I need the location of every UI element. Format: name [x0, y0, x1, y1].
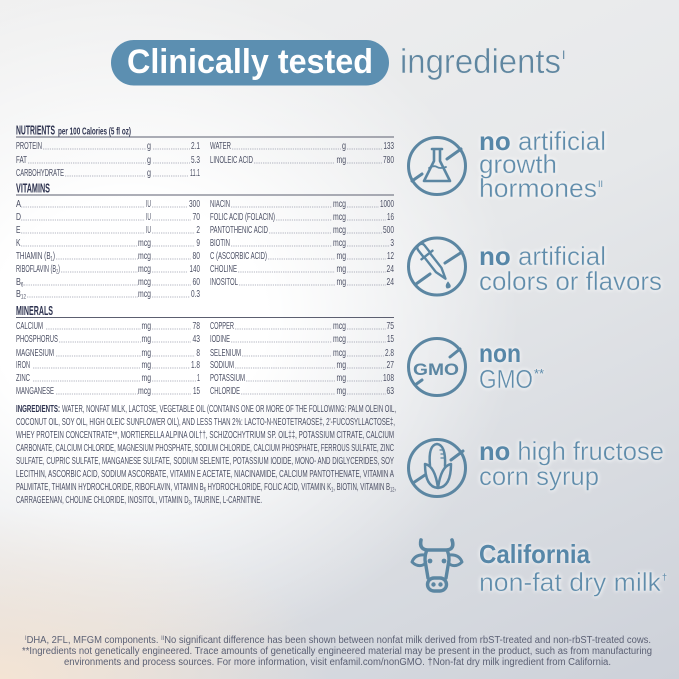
vitamin rows: 3 — [390, 238, 394, 249]
callout: non GMO: non — [479, 338, 521, 368]
vitamin rows: INOSITOL — [210, 277, 238, 288]
mineral rows: 63 — [386, 386, 394, 397]
mineral rows: mg — [336, 386, 346, 397]
panel: minerals table — [16, 304, 394, 397]
vitamin rows: mcg — [333, 212, 346, 223]
mineral rows: IRON — [16, 360, 30, 371]
mineral rows: 15 — [387, 334, 394, 345]
callout: no artificial growth hormones: growth — [479, 149, 557, 179]
callout: no artificial growth hormones: no artificial — [479, 126, 606, 156]
footnotes: **Ingredients not genetically engineered. Trace amounts of genetically engineered material may be present in the product, such as from manufacturing — [22, 646, 652, 657]
callout: no high fructose corn syrup: no high fructose — [479, 436, 664, 466]
nutrient rows: LINOLEIC ACID — [210, 155, 253, 166]
footnotes: DHA, 2FL, MFGM components. — [27, 635, 161, 646]
nutrient rows: FAT — [16, 155, 27, 166]
text block: ingredients: 6 — [204, 486, 206, 494]
nutrient rows: 133 — [384, 141, 394, 152]
icon: cow head — [412, 540, 462, 591]
mineral rows: 75 — [386, 321, 394, 332]
mineral rows: mcg — [138, 386, 151, 397]
vitamin rows: 500 — [383, 225, 394, 236]
mineral rows: SELENIUM — [210, 348, 241, 359]
text block: ingredients: CARRAGEENAN, CHOLINE CHLORIDE, INOSITOL, VITAMIN D — [16, 495, 316, 506]
mineral rows: SODIUM — [210, 360, 234, 371]
mineral rows: mg — [142, 321, 151, 332]
footnotes: environments and process sources. For more information, visit enfamil.com/nonGMO. †Non-fat dry milk ingredient from California. — [64, 657, 611, 668]
vitamin rows: 24 — [386, 264, 394, 275]
icon: GMO crossed out — [408, 338, 466, 396]
vitamin rows: E — [16, 225, 21, 236]
vitamin rows: PANTOTHENIC ACID — [210, 225, 268, 236]
vitamin rows: B — [16, 289, 23, 300]
vitamin rows: 1 — [51, 256, 53, 262]
text block: ingredients: PALMITATE, THIAMIN HYDROCHLORIDE, RIBOFLAVIN, VITAMIN B — [16, 482, 338, 493]
text block: ingredients: 1 — [331, 486, 333, 494]
nutrient rows: 2.1 — [191, 141, 200, 152]
callout: California non-fat dry milk — [479, 539, 667, 597]
text block: ingredients: SULFATE, CUPRIC SULFATE, MANGANESE SULFATE, SODIUM SELENITE, POTASSIUM IODIDE, MONO- AND DIGLYCERIDES, SOY — [16, 456, 394, 467]
title suffix: ingredients — [400, 43, 561, 81]
vitamin rows: 2 — [196, 225, 200, 236]
callout: non GMO: ** — [534, 366, 544, 381]
vitamin rows: mcg — [138, 238, 151, 249]
footnotes: II — [161, 636, 165, 642]
panel: nutrients table — [16, 124, 394, 179]
title suffix: I — [562, 48, 565, 62]
vitamin rows: C (ASCORBIC ACID) — [210, 251, 267, 262]
vitamin rows: 1000 — [380, 199, 394, 210]
nutrient rows: g — [342, 141, 346, 152]
vitamin rows: mcg — [138, 251, 151, 262]
title — [111, 40, 565, 86]
vitamin rows — [16, 199, 394, 300]
callout: California non-fat dry milk: † — [662, 572, 667, 582]
vitamin rows: mcg — [138, 289, 151, 300]
text block: ingredients: , BIOTIN, VITAMIN B — [333, 482, 390, 493]
heading: nutrients: per 100 Calories (5 fl oz) — [58, 126, 131, 138]
callout: non GMO: GMO — [479, 364, 533, 394]
vitamin rows: 9 — [196, 238, 200, 249]
mineral rows — [16, 321, 394, 397]
vitamin rows: B — [16, 277, 23, 288]
nutrient rows: CARBOHYDRATE — [16, 168, 64, 179]
vitamin rows: D — [16, 212, 21, 223]
text block: ingredients: WHEY PROTEIN CONCENTRATE**, MORTIERELLA ALPINA OIL††, SCHIZOCHYTRIUM SP. OIL‡‡, POTASSIUM CITRATE, CALCIUM — [16, 430, 394, 441]
footnotes: I — [25, 636, 27, 642]
callout: no artificial colors or flavors — [479, 241, 662, 296]
mineral rows: mcg — [333, 321, 346, 332]
heading: nutrients: NUTRIENTS — [16, 124, 55, 138]
mineral rows: mcg — [333, 348, 346, 359]
mineral rows: 108 — [383, 373, 394, 384]
text block: ingredients: WATER, NONFAT MILK, LACTOSE, VEGETABLE OIL (CONTAINS ONE OR MORE OF THE FOLLOWING: PALM OLEIN OIL, — [62, 404, 396, 415]
heading: minerals: MINERALS — [16, 304, 53, 318]
mineral rows: MAGNESIUM — [16, 348, 54, 359]
vitamin rows: 12 — [21, 294, 26, 300]
footnotes — [22, 635, 652, 668]
vitamin rows: 2 — [56, 268, 58, 276]
text block: ingredients: , — [394, 482, 396, 493]
mineral rows: 1 — [197, 373, 200, 384]
vitamin rows: IU — [146, 212, 151, 223]
vitamin rows: mcg — [138, 277, 151, 288]
mineral rows: mg — [336, 360, 346, 371]
vitamin rows: RIBOFLAVIN (B — [16, 264, 90, 275]
vitamin rows: mg — [336, 264, 346, 275]
text block: ingredients: INGREDIENTS: — [16, 404, 60, 415]
callout: no artificial growth hormones: hormones — [479, 173, 597, 203]
callout: California non-fat dry milk: California — [479, 539, 590, 569]
vitamin rows: 80 — [192, 251, 200, 262]
vitamin rows: 300 — [189, 199, 200, 210]
vitamin rows: BIOTIN — [210, 238, 230, 249]
vitamin rows: 140 — [190, 264, 200, 275]
vitamin rows: K — [16, 238, 21, 249]
mineral rows: MANGANESE — [16, 386, 54, 397]
mineral rows: 27 — [386, 360, 394, 371]
mineral rows: mg — [336, 373, 346, 384]
mineral rows: mg — [142, 348, 151, 359]
vitamin rows: ) — [53, 251, 55, 262]
text block: ingredients — [16, 404, 396, 506]
mineral rows: CHLORIDE — [210, 386, 240, 397]
vitamin rows: mcg — [333, 225, 346, 236]
mineral rows: IODINE — [210, 334, 230, 345]
mineral rows: 8 — [196, 348, 200, 359]
mineral rows: COPPER — [210, 321, 234, 332]
vitamin rows: 16 — [387, 212, 394, 223]
text block: ingredients: 3 — [189, 500, 191, 506]
vitamin rows: mcg — [138, 264, 151, 275]
vitamin rows: 6 — [21, 282, 24, 288]
vitamin rows: 12 — [387, 251, 394, 262]
nutrient rows: 5.3 — [191, 155, 200, 166]
nutrient rows: PROTEIN — [16, 141, 42, 152]
vitamin rows: IU — [146, 225, 151, 236]
icon: flask crossed out — [408, 138, 466, 194]
icon: GMO crossed out: GMO — [413, 360, 459, 379]
vitamin rows: mcg — [333, 238, 346, 249]
callout: no artificial growth hormones — [479, 126, 606, 203]
heading: nutrients — [16, 124, 394, 138]
callout: California non-fat dry milk: non-fat dry milk — [479, 567, 662, 597]
nutrient rows: mg — [336, 155, 346, 166]
text block: ingredients: CARBONATE, CALCIUM CHLORIDE, MAGNESIUM PHOSPHATE, SODIUM CHLORIDE, CALCIUM PHOSPHATE, FERROUS SULFATE, ZINC — [16, 443, 394, 454]
mineral rows: mcg — [333, 334, 346, 345]
heading: vitamins: VITAMINS — [16, 182, 50, 196]
callout: no artificial growth hormones: II — [598, 179, 603, 189]
mineral rows: 43 — [192, 334, 200, 345]
vitamin rows: A — [16, 199, 21, 210]
footnotes: No significant difference has been shown between nonfat milk derived from rbST-treated and non-rbST-treated cows. — [164, 635, 651, 646]
mineral rows: CALCIUM — [16, 321, 43, 332]
vitamin rows: 70 — [192, 212, 200, 223]
text block: ingredients: HYDROCHLORIDE, FOLIC ACID, VITAMIN K — [206, 482, 331, 493]
vitamin rows: THIAMIN (B — [16, 251, 72, 262]
vitamin rows: NIACIN — [210, 199, 230, 210]
text block: ingredients: LECITHIN, ASCORBIC ACID, SODIUM ASCORBATE, VITAMIN E ACETATE, NIACINAMIDE, CALCIUM PANTOTHENATE, VITAMIN A — [16, 469, 394, 480]
callout: no artificial colors or flavors: colors or flavors — [479, 266, 662, 296]
mineral rows: 2.8 — [385, 348, 394, 359]
text block: ingredients: , TAURINE, L-CARNITINE. — [191, 495, 262, 506]
callout: no high fructose corn syrup — [479, 436, 664, 491]
vitamin rows: CHOLINE — [210, 264, 237, 275]
vitamin rows: IU — [146, 199, 151, 210]
vitamin rows: mg — [336, 277, 346, 288]
mineral rows: mg — [142, 373, 151, 384]
vitamin rows: mcg — [333, 199, 346, 210]
icon: corn crossed out — [408, 440, 466, 496]
title pill: Clinically tested — [127, 43, 373, 81]
mineral rows: 78 — [192, 321, 200, 332]
callout: no high fructose corn syrup: corn syrup — [479, 461, 599, 491]
vitamin rows: ) — [58, 264, 60, 275]
icon: dropper crossed out — [408, 238, 466, 295]
text block: ingredients: COCONUT OIL, SOY OIL, HIGH OLEIC SUNFLOWER OIL), AND LESS THAN 2%: LACTO-N-NEOTETRAOSE‡, 2'-FUCOSYLLACTOSE‡, — [16, 417, 395, 428]
mineral rows: ZINC — [16, 373, 30, 384]
mineral rows: POTASSIUM — [210, 373, 245, 384]
mineral rows: 15 — [193, 386, 200, 397]
text block: ingredients: 12 — [390, 486, 395, 494]
mineral rows: PHOSPHORUS — [16, 334, 58, 345]
mineral rows: mg — [142, 360, 151, 371]
mineral rows: 1.8 — [191, 360, 200, 371]
panel: vitamins table — [16, 182, 394, 300]
callout: no artificial colors or flavors: no artificial — [479, 241, 606, 271]
nutrient rows: WATER — [210, 141, 231, 152]
vitamin rows: FOLIC ACID (FOLACIN) — [210, 212, 275, 223]
vitamin rows: 24 — [386, 277, 394, 288]
callout: non GMO — [479, 338, 544, 394]
vitamin rows: mg — [336, 251, 346, 262]
nutrient rows — [16, 141, 394, 179]
vitamin rows: 60 — [192, 277, 200, 288]
nutrient rows: 780 — [383, 155, 394, 166]
nutrient rows: g — [147, 155, 151, 166]
mineral rows: mg — [142, 334, 151, 345]
nutrient rows: 11.1 — [190, 168, 200, 179]
vitamin rows: 0.3 — [191, 289, 200, 300]
nutrient rows: g — [147, 168, 151, 179]
nutrient rows: g — [147, 141, 151, 152]
